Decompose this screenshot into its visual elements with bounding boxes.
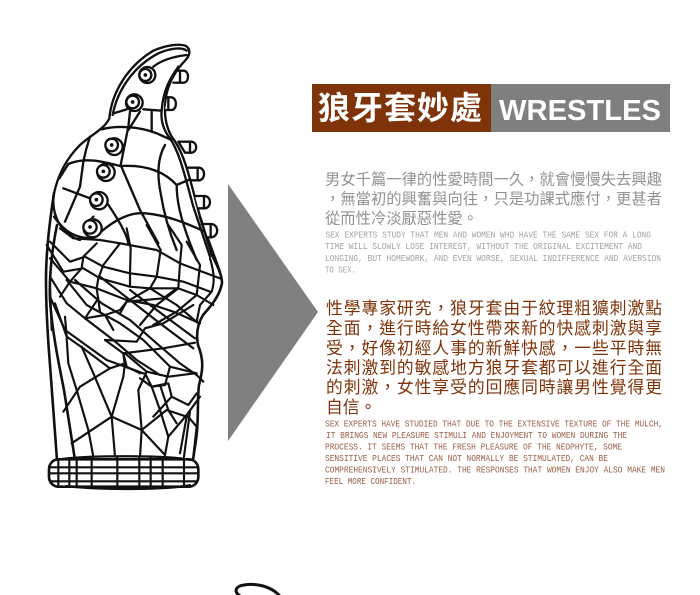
text block: brown Chinese paragraph	[326, 299, 662, 417]
text block: brown Chinese paragraph: 全面，進行時給女性帶來新的快感刺激與享	[326, 318, 662, 338]
heading banner	[312, 84, 670, 132]
text block: brown Chinese paragraph: 性學專家研究，狼牙套由于紋理粗獷刺激點	[326, 299, 662, 318]
knobs on ridge	[83, 67, 155, 237]
text block: grey Chinese paragraph: 男女千篇一律的性愛時間一久，就會慢慢失去興趣	[325, 170, 662, 188]
text block: brown English paragraph: FEEL MORE CONFIDENT.	[325, 476, 416, 487]
text block: brown English paragraph: IT BRINGS NEW PLEASURE STIMULI AND ENJOYMENT TO WOMEN DURING THE	[326, 430, 627, 441]
dense diagonal band of mesh	[50, 277, 198, 387]
text block: grey Chinese paragraph: ，無當初的興奮與向往，只是功課式應付，更甚者	[325, 190, 662, 208]
elastic ring at the base	[49, 412, 198, 489]
heading: Chinese title on brown	[312, 84, 491, 132]
illustration: textured sleeve line drawing	[46, 45, 222, 489]
text block: grey English paragraph: TIME WILL SLOWLY LOSE INTEREST, WITHOUT THE ORIGINAL EXCITEMENT AND	[325, 241, 642, 252]
text block: brown Chinese paragraph: 受，好像初經人事的新鮮快感，一些平時無	[326, 338, 662, 358]
text block: grey English paragraph	[325, 230, 661, 275]
right nubs	[165, 71, 217, 237]
heading: English title on grey	[491, 84, 670, 132]
text block: brown English paragraph	[325, 418, 665, 487]
text block: grey English paragraph: TO SEX.	[325, 264, 356, 275]
upper part of sleeve with horn and nubs	[53, 45, 220, 272]
outer silhouette of sleeve	[46, 193, 222, 460]
text block: brown English paragraph: PROCESS. IT SEEMS THAT THE FRESH PLEASURE OF THE NEOPHYTE, SOME	[325, 442, 622, 452]
heading: English title on grey: WRESTLES	[499, 95, 661, 127]
text block: grey Chinese paragraph	[325, 170, 662, 228]
text block: grey Chinese paragraph: 從而性冷淡厭惡性愛。	[325, 210, 478, 228]
heading: Chinese title on brown: 狼牙套妙處	[318, 90, 482, 126]
middle mesh of sleeve	[47, 225, 220, 325]
arrow: grey triangle pointer	[228, 184, 318, 441]
text block: brown Chinese paragraph: 自信。	[326, 398, 376, 417]
illustration: cropped top of next drawing	[236, 584, 279, 595]
text block: brown Chinese paragraph: 的刺激，女性享受的回應同時讓男性覺得更	[326, 377, 662, 397]
text block: brown English paragraph: SENSITIVE PLACES THAT CAN NOT NORMALLY BE STIMULATED, CAN BE	[325, 453, 608, 464]
text block: brown Chinese paragraph: 法刺激到的敏感地方狼牙套都可以進行全面	[326, 358, 662, 378]
lower mesh of sleeve	[63, 338, 203, 457]
